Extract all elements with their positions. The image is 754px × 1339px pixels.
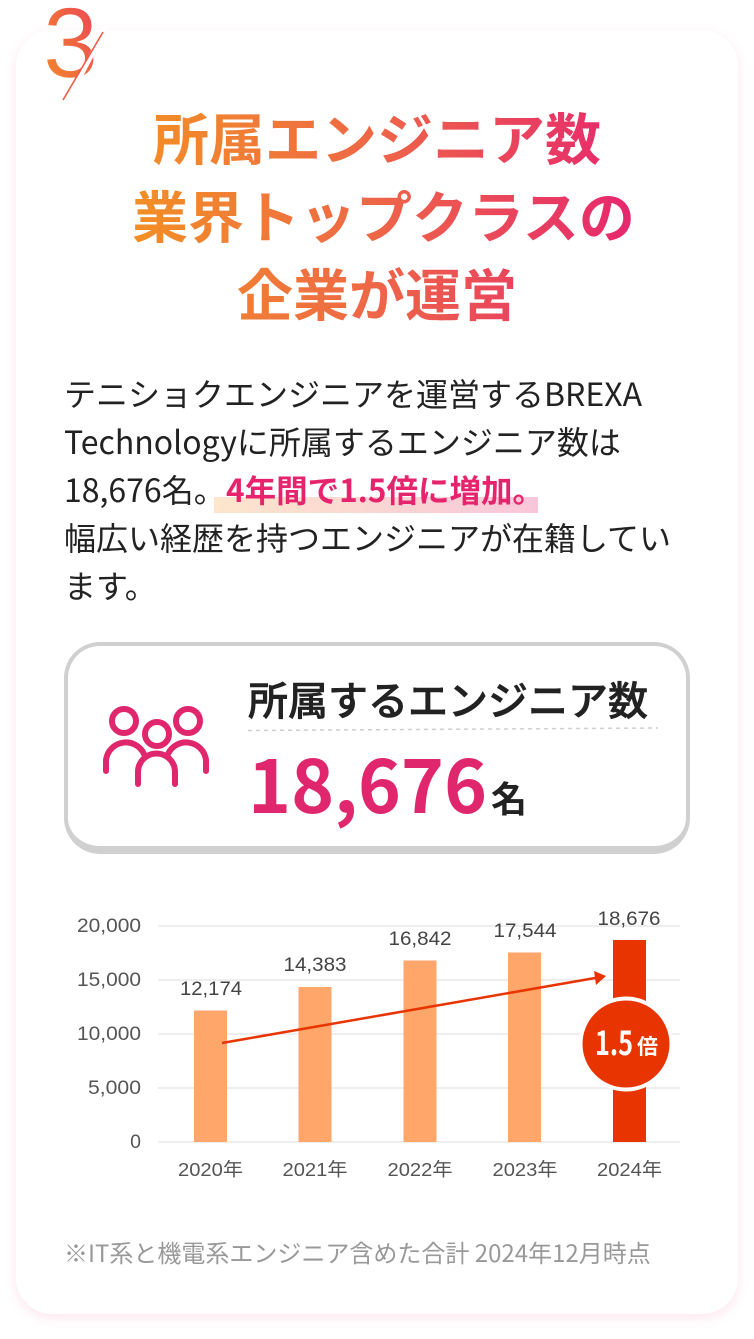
body text: Technologyに所属するエンジニア数は xyxy=(64,418,621,464)
multiplier badge: 1.5 xyxy=(595,1017,633,1065)
body text: 4年間で1.5倍に増加。 xyxy=(226,466,544,512)
stat number: 18,676 xyxy=(248,729,487,835)
y axis labels xyxy=(77,915,141,1153)
dotted divider xyxy=(248,727,658,732)
y axis labels: 5,000 xyxy=(88,1077,141,1099)
value labels: 17,544 xyxy=(494,921,557,942)
growth arrow xyxy=(222,971,606,1043)
y axis labels: 15,000 xyxy=(77,969,141,991)
stat box xyxy=(64,642,690,854)
y axis labels: 0 xyxy=(130,1131,141,1153)
body text: テニショクエンジニアを運営するBREXA xyxy=(64,370,642,416)
body text: ます。 xyxy=(64,562,157,608)
title xyxy=(132,96,635,333)
x axis labels: 2024年 xyxy=(597,1159,662,1180)
x axis labels xyxy=(178,1159,662,1180)
x axis labels: 2021年 xyxy=(282,1159,348,1180)
title: 所属エンジニア数 xyxy=(153,96,601,177)
body text: 幅広い経歴を持つエンジニアが在籍してい xyxy=(64,514,671,560)
highlight xyxy=(214,497,538,513)
icon: people xyxy=(103,706,209,787)
y axis labels: 20,000 xyxy=(77,915,141,937)
stat label: 所属するエンジニア数 xyxy=(248,669,648,727)
body text xyxy=(64,370,671,608)
value labels: 16,842 xyxy=(388,929,452,950)
y axis labels: 10,000 xyxy=(77,1023,141,1045)
multiplier badge: 倍 xyxy=(637,1031,658,1061)
x axis labels: 2022年 xyxy=(388,1159,452,1180)
body text: 18,676名。 xyxy=(64,466,226,512)
x axis labels: 2023年 xyxy=(492,1159,558,1180)
bar chart xyxy=(77,909,680,1180)
multiplier badge xyxy=(580,998,672,1090)
bars xyxy=(194,940,646,1142)
value labels xyxy=(180,909,660,1000)
footnote: ※IT系と機電系エンジニア含めた合計 2024年12月時点 xyxy=(64,1234,651,1269)
title: 企業が運営 xyxy=(237,252,517,333)
title: 業界トップクラスの xyxy=(132,174,635,255)
value labels: 14,383 xyxy=(284,955,346,976)
value labels: 18,676 xyxy=(598,909,660,930)
value labels: 12,174 xyxy=(180,979,242,1000)
stat unit: 名 xyxy=(491,771,527,823)
x axis labels: 2020年 xyxy=(178,1159,243,1180)
